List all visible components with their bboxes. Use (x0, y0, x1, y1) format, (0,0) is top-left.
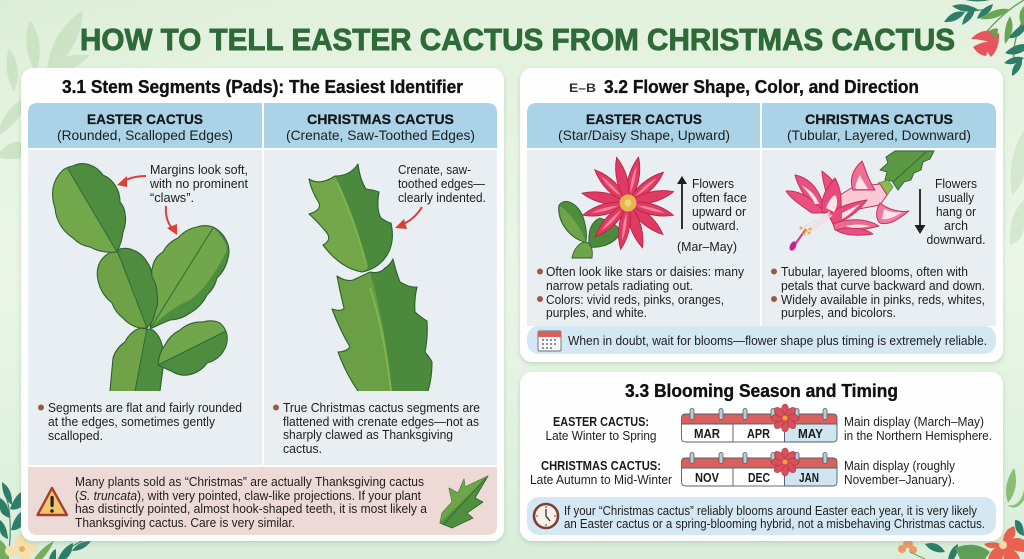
column headers: (Rounded, Scalloped Edges) (57, 127, 233, 143)
callout: flowers hang downward: downward. (926, 232, 986, 247)
callout: crenate edges: Crenate, saw- (398, 162, 471, 177)
arrow: downward (914, 189, 926, 234)
text block: Christmas flower bullets: Widely available in pinks, reds, whites, (781, 292, 985, 307)
column headers: EASTER CACTUS (586, 111, 702, 127)
callout: flowers face upward: (Mar–May) (677, 239, 737, 254)
heading: 3.2: 3.2 Flower Shape, Color, and Direction (604, 77, 919, 97)
callout: crenate edges: toothed edges— (398, 176, 485, 191)
column headers: (Crenate, Saw-Toothed Edges) (286, 127, 475, 143)
calendar: November to January: JAN (799, 471, 819, 485)
column headers: EASTER CACTUS (87, 111, 203, 127)
text block: Easter main display: Main display (March–May) (844, 414, 984, 429)
calendar: March to May (682, 404, 837, 442)
column bodies (527, 150, 996, 326)
text block: Easter flower bullets: Often look like stars or daisies: many (546, 264, 744, 279)
calendar: November to January (682, 448, 837, 486)
stamen and pistil (803, 212, 832, 232)
icon: holly-like Thanksgiving segment (440, 476, 488, 528)
callout: flowers face upward: outward. (692, 218, 739, 233)
arrow: upward (677, 176, 687, 229)
heading: 3.1: 3.1 Stem Segments (Pads): The Easiest Identifier (62, 77, 463, 97)
illustration: toothed Christmas cactus segments (309, 164, 432, 391)
text block: Christmas flower bullets (771, 264, 985, 320)
column headers: CHRISTMAS CACTUS (805, 111, 953, 127)
column headers: (Star/Daisy Shape, Upward) (558, 127, 730, 143)
text block: Easter segments bullet: at the edges, sometimes gently (48, 414, 215, 429)
calendar: March to May: MAR (694, 427, 720, 441)
callout: flowers hang downward: Flowers (935, 176, 977, 191)
panel: flower shape (520, 68, 1003, 362)
text block: Easter main display (844, 414, 992, 443)
callout: Thanksgiving cactus warning: Thanksgiving cactus. Care is very similar. (75, 515, 295, 530)
callout: flowers hang downward: arch (944, 218, 968, 233)
text block: Christmas main display (844, 458, 955, 487)
panel: blooming season (520, 372, 1003, 541)
label: Christmas timing (530, 458, 673, 487)
text block: Christmas segments bullet: cactus. (283, 441, 322, 456)
text block: Christmas flower bullets: petals that curve backward and down. (781, 278, 985, 293)
icon: clock (534, 504, 558, 528)
icon: calendar (538, 331, 561, 351)
callout: margins look soft (149, 162, 248, 205)
icon label: E-B: E–B (569, 81, 596, 95)
calendar: March to May: MAY (798, 427, 824, 441)
text block: Easter segments bullet: scalloped. (48, 428, 103, 443)
illustration: tubular Christmas flower (786, 151, 934, 252)
text block: Christmas segments bullet (273, 400, 480, 456)
text block: Easter flower bullets: purples, and white. (546, 305, 647, 320)
callout: wait for blooms (527, 326, 996, 354)
callout: margins look soft: Margins look soft, (150, 162, 248, 177)
callout: flowers hang downward: hang or (936, 204, 977, 219)
callout: wait for blooms: When in doubt, wait for blooms—flower shape plus timing is extremely reliable. (568, 333, 987, 348)
arrow: to right pad (166, 206, 177, 235)
calendar: November to January: NOV (695, 471, 720, 485)
panel: stem segments (21, 68, 504, 541)
arrow: to toothed edge (395, 207, 422, 229)
callout: crenate edges (398, 162, 486, 205)
text block: Christmas segments bullet: sharply clawed as Thanksgiving (283, 427, 453, 442)
text block: Christmas segments bullet: True Christmas cactus segments are (283, 400, 480, 415)
callout: flowers hang downward: usually (938, 190, 974, 205)
title: HOW TO TELL EASTER CACTUS FROM CHRISTMAS CACTUS (80, 22, 955, 57)
callout: Easter bloom note (527, 497, 996, 535)
text block: Easter segments bullet: Segments are flat and fairly rounded (48, 400, 242, 415)
text block: Christmas main display: Main display (roughly (844, 458, 955, 473)
column headers (28, 103, 497, 148)
callout: flowers face upward: often face (692, 190, 747, 205)
leaf segment (880, 151, 934, 190)
decoration: pale leaves top left (0, 10, 90, 159)
label: Easter timing: EASTER CACTUS: (553, 414, 649, 429)
icon: warning triangle (38, 488, 67, 515)
text block: Christmas flower bullets: Tubular, layered blooms, often with (781, 264, 968, 279)
text block: Christmas main display: November–January). (844, 472, 955, 487)
heading: 3.3: 3.3 Blooming Season and Timing (625, 381, 898, 401)
text block: Christmas flower bullets: purples, and bicolors. (781, 305, 896, 320)
column headers (527, 103, 996, 148)
callout: margins look soft: “claws”. (150, 190, 194, 205)
column bodies (28, 150, 497, 465)
text block: Easter flower bullets: Colors: vivid reds, pinks, oranges, (546, 292, 724, 307)
decoration: pale leaves right (1010, 130, 1024, 245)
callout: Thanksgiving cactus warning: (S. truncata), with very pointed, claw-like projections. If your plant (75, 488, 421, 503)
callout: flowers face upward: Flowers (692, 176, 734, 191)
callout: margins look soft: with no prominent (149, 176, 248, 191)
callout: Easter bloom note: If your “Christmas cactus” reliably blooms around Easter each year, it is very likely (564, 503, 977, 518)
label: Easter timing (546, 414, 656, 443)
text block: Easter flower bullets: narrow petals radiating out. (546, 278, 693, 293)
text block: Easter flower bullets (537, 264, 744, 320)
calendar: March to May: APR (747, 427, 770, 441)
decoration: bottom right leaves and flowers (898, 468, 1024, 559)
label: Christmas timing: CHRISTMAS CACTUS: (541, 458, 661, 473)
callout: crenate edges: clearly indented. (398, 190, 486, 205)
callout: flowers face upward (677, 176, 747, 254)
text block: Easter segments bullet (38, 400, 242, 443)
column headers: (Tubular, Layered, Downward) (787, 127, 971, 143)
arrow: to top pad (117, 176, 146, 187)
callout: flowers hang downward (926, 176, 986, 247)
illustration: star-shaped Easter flower (559, 156, 675, 258)
text block: Easter main display: in the Northern Hemisphere. (844, 428, 992, 443)
decoration: bottom left leaves and flower (0, 482, 91, 559)
callout: Thanksgiving cactus warning (28, 467, 497, 535)
label: Christmas timing: Late Autumn to Mid-Winter (530, 472, 673, 487)
decoration: top right sprig with red flower (944, 0, 1024, 76)
label: Easter timing: Late Winter to Spring (546, 428, 656, 443)
column headers: CHRISTMAS CACTUS (307, 111, 454, 127)
text block: Christmas segments bullet: flattened with crenate edges—not as (283, 414, 479, 429)
illustration: rounded Easter cactus segments (53, 164, 229, 391)
callout: Thanksgiving cactus warning: has distinctly pointed, almost hook-shaped teeth, it is most likely a (75, 501, 428, 516)
callout: flowers face upward: upward or (692, 204, 747, 219)
callout: Thanksgiving cactus warning: Many plants sold as “Christmas” are actually Thanksgiving cactus (75, 474, 424, 489)
calendar: November to January: DEC (748, 471, 770, 485)
